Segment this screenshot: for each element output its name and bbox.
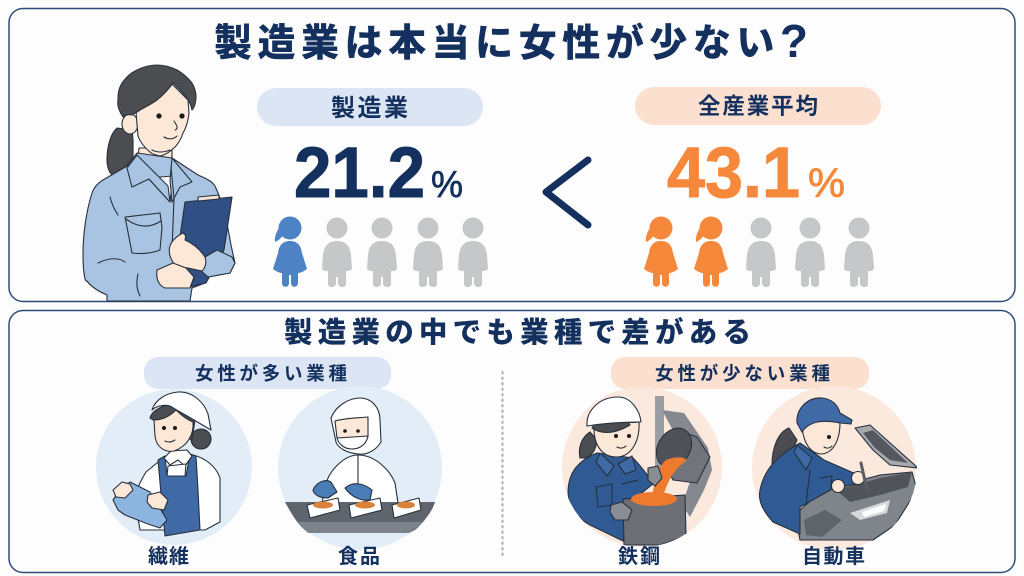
title: ? — [780, 15, 808, 67]
label: automobile: 自動車 — [802, 545, 865, 568]
subheading: 製造業の中でも業種で差がある — [284, 316, 751, 349]
pill: all industries label — [635, 87, 881, 125]
label: textile: 繊維 — [148, 545, 189, 568]
pill: all industries label: 全産業平均 — [698, 94, 818, 119]
illustration: auto worker — [752, 386, 918, 550]
illustration: food worker — [278, 386, 442, 550]
group: sectors with many women — [96, 357, 442, 568]
pill: sectors with many women: 女性が多い業種 — [195, 363, 347, 384]
illustration: steel worker — [562, 387, 722, 547]
illustration: woman with clipboard — [83, 65, 235, 301]
pictogram: two women of five — [644, 216, 874, 287]
pill: sectors with few women: 女性が少ない業種 — [655, 363, 830, 384]
panel: differences by sector — [9, 310, 1015, 572]
pill: sectors with many women — [144, 357, 391, 389]
icon: less-than sign — [546, 160, 588, 225]
value: 21.2%: % — [431, 164, 463, 205]
comparison: all industries — [635, 87, 881, 287]
value: 43.1%: % — [808, 160, 845, 206]
comparison: manufacturing — [257, 88, 488, 287]
value: 21.2%: 21.2 — [294, 134, 425, 213]
label: steel: 鉄鋼 — [618, 545, 660, 568]
value: 43.1%: 43.1 — [667, 134, 800, 213]
label: food: 食品 — [338, 545, 380, 568]
illustration: textile worker — [96, 389, 252, 545]
divider: dotted line — [502, 372, 504, 558]
pill: manufacturing label: 製造業 — [331, 95, 408, 122]
panel: national comparison — [9, 8, 1015, 302]
pill: sectors with few women — [611, 357, 869, 389]
title: 製造業は本当に女性が少ない — [214, 23, 774, 65]
pill: manufacturing label — [257, 88, 483, 126]
pictogram: one woman of five — [273, 216, 488, 287]
group: sectors with few women — [562, 357, 918, 568]
